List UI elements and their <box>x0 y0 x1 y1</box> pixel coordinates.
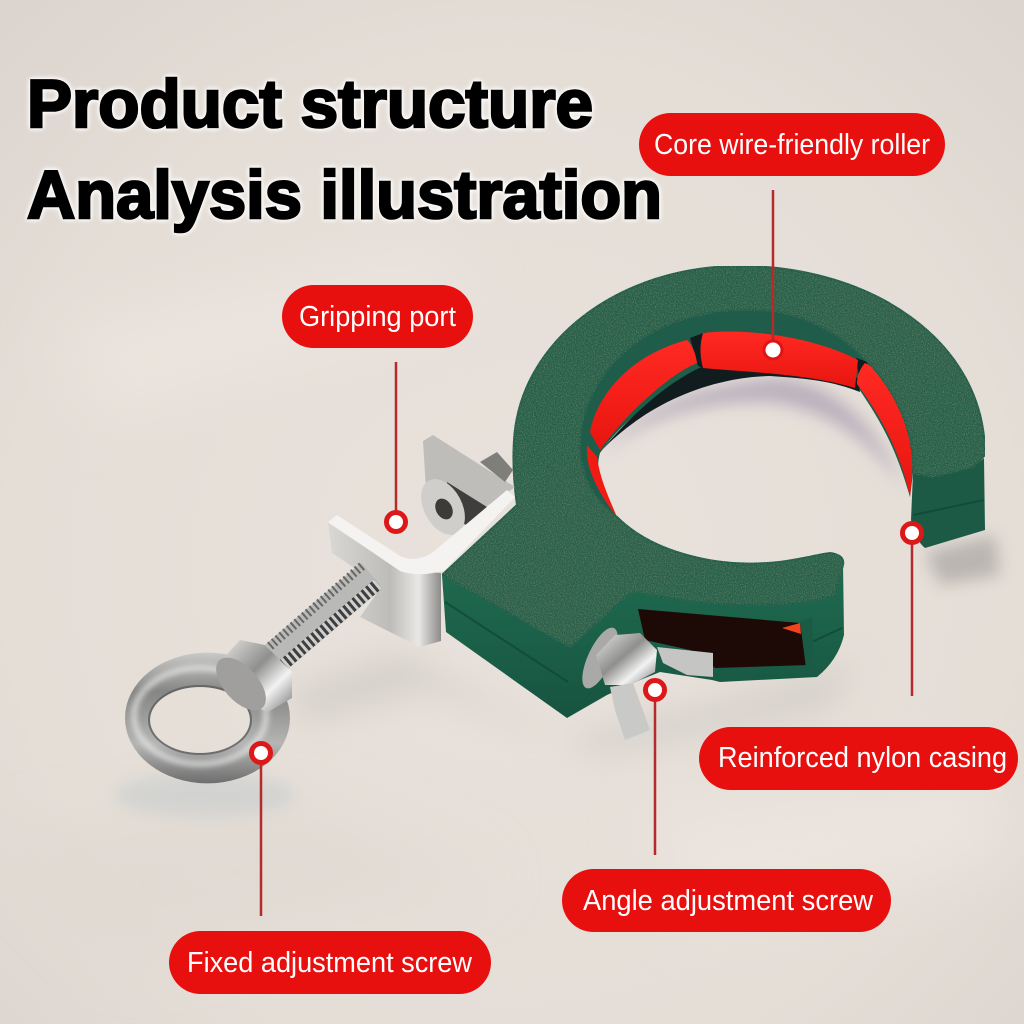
dark gap below rollers <box>600 360 860 452</box>
ring <box>125 653 290 783</box>
title <box>27 66 662 233</box>
nut shadow <box>447 482 487 525</box>
threaded shaft <box>268 566 378 666</box>
right wing <box>657 647 713 677</box>
flat face <box>207 649 275 719</box>
washer <box>575 623 625 693</box>
lower wing <box>610 683 650 740</box>
slot opening <box>638 609 814 668</box>
bracket front plate <box>328 523 441 647</box>
bracket bright bend <box>328 490 515 574</box>
callout: angle adjustment screw: Angle adjustment screw <box>583 885 874 917</box>
callout: gripping port <box>282 285 473 532</box>
inner cavity shadow <box>600 378 905 490</box>
eye ring <box>125 640 292 783</box>
callout: reinforced nylon casing <box>699 524 1018 790</box>
roller: left <box>590 340 697 450</box>
collar nut <box>220 640 292 712</box>
callout: gripping port: Gripping port <box>299 301 456 333</box>
roller: lower-left tail <box>587 445 617 517</box>
red rollers <box>587 331 915 517</box>
title: Analysis illustration <box>27 157 662 233</box>
bracket back plate <box>423 435 515 512</box>
callout: core wire-friendly roller: Core wire-friendly roller <box>654 129 930 161</box>
wing nut <box>575 623 713 740</box>
roller: right <box>857 363 915 497</box>
callout: fixed adjustment screw <box>169 744 491 994</box>
callout: core wire-friendly roller <box>639 113 945 359</box>
nut body <box>596 633 657 685</box>
cast shadows <box>115 535 1000 817</box>
callout: fixed adjustment screw: Fixed adjustment screw <box>187 947 473 979</box>
green casing side faces <box>442 458 985 718</box>
green casing top face <box>442 266 985 647</box>
threaded stub <box>480 452 513 482</box>
callout: reinforced nylon casing: Reinforced nylon casing <box>718 742 1007 774</box>
callout: angle adjustment screw <box>562 680 891 932</box>
product illustration: cable gripper <box>115 266 1000 817</box>
roller: centre <box>700 331 858 388</box>
cap screw <box>412 472 474 542</box>
inner green wall <box>580 310 913 517</box>
title: Product structure <box>27 66 593 142</box>
metal bracket <box>328 435 515 647</box>
